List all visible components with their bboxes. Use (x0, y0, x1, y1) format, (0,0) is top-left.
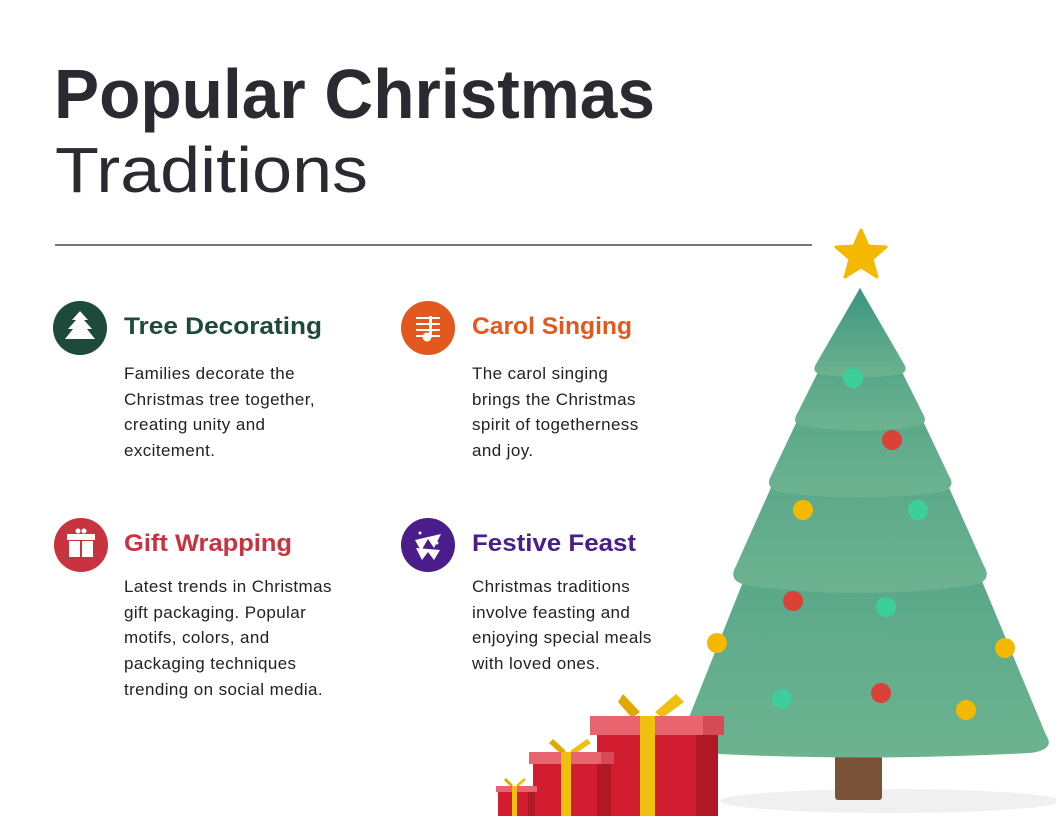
ornaments (707, 368, 1015, 720)
icon: bunting (401, 518, 455, 572)
panel: gift wrapping (54, 518, 332, 699)
text: gift body: Latest trends in Christmas (124, 577, 332, 596)
panel: carol singing (401, 301, 639, 460)
text: feast body: enjoying special meals (472, 628, 652, 647)
text: tree body: Families decorate the (124, 364, 295, 383)
text: carol body: brings the Christmas (472, 390, 636, 409)
heading: Festive Feast: Festive Feast (472, 530, 636, 557)
small gift (496, 778, 537, 816)
title (54, 55, 655, 206)
illustration: christmas tree (680, 230, 1056, 813)
text: gift body: motifs, colors, and (124, 628, 270, 647)
icon: star (836, 230, 886, 277)
text: feast body: with loved ones. (471, 654, 600, 673)
big gift (590, 694, 724, 816)
text: gift body: packaging techniques (124, 654, 296, 673)
text: carol body: and joy. (472, 441, 533, 460)
panel: tree decorating (53, 301, 322, 460)
text: gift body: trending on social media. (124, 680, 323, 699)
text: gift body: gift packaging. Popular (124, 603, 306, 622)
icon: tree (53, 301, 107, 355)
heading: Gift Wrapping: Gift Wrapping (124, 530, 292, 557)
panel: festive feast (401, 518, 652, 673)
title: Popular Christmas (54, 55, 655, 133)
icon: music (401, 301, 455, 355)
text: tree body: creating unity and (124, 415, 265, 434)
title: Traditions (55, 134, 368, 206)
illustration: gifts (496, 694, 724, 816)
heading: Carol Singing: Carol Singing (472, 313, 632, 340)
heading: Tree Decorating: Tree Decorating (124, 313, 322, 340)
text: feast body: involve feasting and (472, 603, 630, 622)
medium gift (529, 739, 614, 816)
text: feast body: Christmas traditions (472, 577, 630, 596)
icon: gift (54, 518, 108, 572)
text: carol body: spirit of togetherness (472, 415, 639, 434)
text: tree body: Christmas tree together, (124, 390, 315, 409)
text: carol body: The carol singing (472, 364, 608, 383)
text: tree body: excitement. (124, 441, 215, 460)
